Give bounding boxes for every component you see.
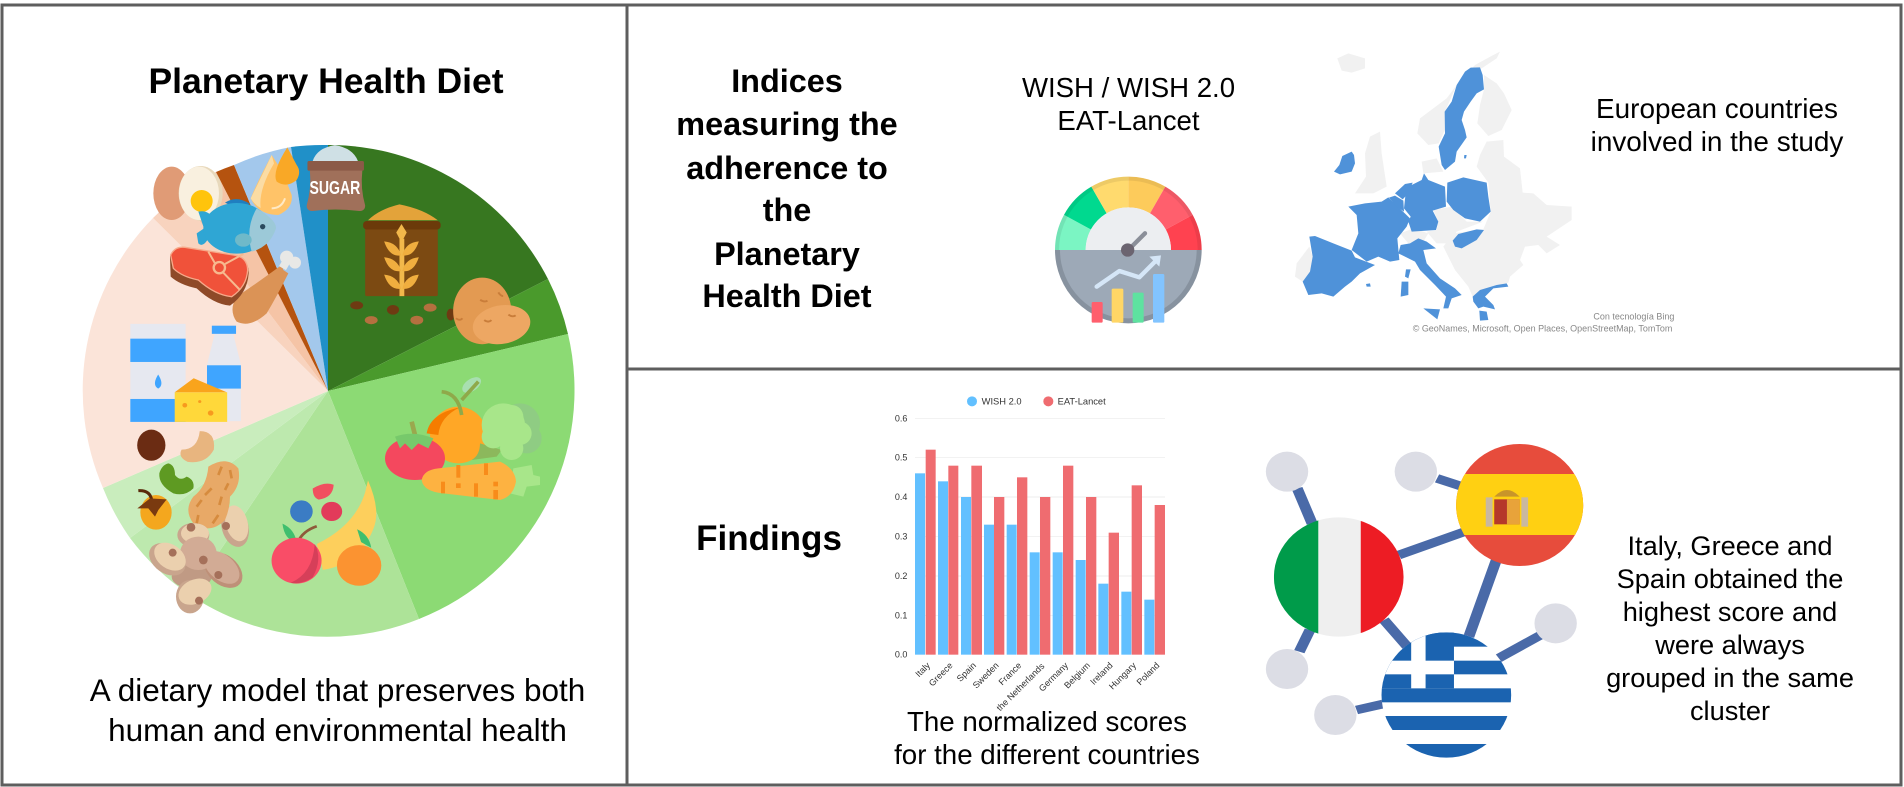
flag: Spain bbox=[1454, 443, 1585, 567]
heading: Indices measuring the adherence: measuring the bbox=[676, 106, 898, 142]
label: European countries involved bbox=[1591, 93, 1843, 157]
y axis labels: 0.4 bbox=[895, 492, 907, 502]
heading: Indices measuring the adherence: adherence to bbox=[686, 150, 888, 186]
network: country cluster bbox=[1266, 443, 1585, 758]
label: European countries involved: involved in the study bbox=[1591, 126, 1843, 157]
non-study countries bbox=[1295, 52, 1572, 297]
heading: Indices measuring the adherence bbox=[676, 63, 898, 314]
icon: sugar bag bbox=[307, 145, 365, 211]
y axis labels: 0.5 bbox=[895, 453, 907, 463]
icon: steak bbox=[170, 247, 249, 306]
food icons on the pie bbox=[130, 145, 542, 613]
icon: grain sack bbox=[350, 204, 455, 325]
x axis country labels: Italy bbox=[913, 660, 932, 679]
label: index names: WISH / WISH 2.0 bbox=[1022, 72, 1235, 103]
x axis country labels: Spain bbox=[955, 660, 978, 684]
icon group: remaining foods bbox=[130, 145, 534, 586]
caption: dietary model definition: human and environmental health bbox=[108, 712, 567, 748]
x axis country labels: Poland bbox=[1135, 660, 1161, 687]
icon: potatoes bbox=[453, 278, 534, 349]
x axis country labels: Greece bbox=[927, 660, 955, 688]
icon: cheese bbox=[175, 378, 227, 422]
y axis labels: 0.1 bbox=[895, 610, 907, 620]
x axis country labels: Ireland bbox=[1088, 660, 1115, 687]
icon: milk carton and bottle bbox=[130, 324, 241, 422]
icon: vegetables bbox=[385, 374, 542, 500]
heading: Indices measuring the adherence: Planetary bbox=[714, 236, 860, 272]
label: cluster finding: were always bbox=[1654, 629, 1805, 660]
bars: EAT-Lancet bbox=[926, 450, 1165, 655]
label: cluster finding: highest score and bbox=[1623, 596, 1837, 627]
icon: eggs bbox=[153, 166, 223, 221]
y axis labels: 0.3 bbox=[895, 532, 907, 542]
x axis country labels: Hungary bbox=[1107, 660, 1138, 691]
icon: legumes, peanut and cashews bbox=[137, 461, 253, 613]
label: European countries involved: European countries bbox=[1596, 93, 1838, 124]
heading: Indices measuring the adherence: the bbox=[763, 192, 811, 228]
icon: oil drops bbox=[251, 147, 299, 215]
y axis labels: 0.2 bbox=[895, 571, 907, 581]
map: Europe with study countries highlighted bbox=[1295, 52, 1674, 334]
icon: fish bbox=[197, 199, 276, 254]
x axis country labels: Sweden bbox=[971, 660, 1001, 690]
heading: Indices measuring the adherence: Health Diet bbox=[702, 278, 872, 314]
label: cluster finding: cluster bbox=[1690, 695, 1770, 726]
heading: Findings: Findings bbox=[696, 519, 842, 558]
x axis country labels: France bbox=[997, 660, 1023, 687]
x axis country labels: Belgium bbox=[1062, 660, 1092, 690]
bar chart: normalized scores by country bbox=[895, 396, 1165, 713]
label: index names: EAT-Lancet bbox=[1057, 105, 1200, 136]
panel: indices and European countries bbox=[627, 5, 1901, 369]
icon: sugar bag: SUGAR bbox=[309, 178, 360, 199]
flag: Greece bbox=[1380, 632, 1513, 758]
chart legend: WISH 2.0 bbox=[982, 396, 1022, 406]
heading: Indices measuring the adherence: Indices bbox=[731, 63, 843, 99]
study countries bbox=[1303, 67, 1508, 321]
panel: Planetary Health Diet bbox=[2, 5, 627, 785]
label: cluster finding bbox=[1606, 530, 1854, 726]
chart legend: EAT-Lancet bbox=[1058, 396, 1106, 406]
icon: almond and cashew bbox=[137, 430, 214, 462]
caption: dietary model definition: A dietary model that preserves both bbox=[90, 672, 585, 708]
map attribution: © GeoNames, Microsoft, Open Places, OpenStreetMap, TomTom bbox=[1413, 324, 1672, 334]
y axis labels: 0.0 bbox=[895, 650, 907, 660]
heading: Planetary Health Diet: Planetary Health Diet bbox=[148, 61, 504, 101]
x axis country labels: the Netherlands bbox=[994, 661, 1047, 713]
y axis labels bbox=[895, 413, 907, 660]
label: cluster finding: grouped in the same bbox=[1606, 662, 1854, 693]
icon: chicken leg bbox=[232, 251, 301, 324]
y axis labels: 0.6 bbox=[895, 413, 907, 423]
caption: dietary model definition bbox=[90, 672, 585, 748]
chart legend bbox=[967, 396, 1106, 406]
x axis country labels bbox=[913, 660, 1161, 713]
bars: WISH 2.0 bbox=[915, 473, 1154, 655]
map attribution: Con tecnología Bing bbox=[1593, 312, 1674, 322]
chart caption bbox=[894, 706, 1200, 770]
chart caption: for the different countries bbox=[894, 739, 1200, 770]
pie chart: diet composition bbox=[83, 145, 575, 637]
x axis country labels: Germany bbox=[1037, 660, 1070, 694]
map attribution bbox=[1413, 312, 1674, 334]
label: cluster finding: Spain obtained the bbox=[1617, 563, 1843, 594]
panel: findings bbox=[627, 369, 1901, 785]
chart caption: The normalized scores bbox=[907, 706, 1187, 737]
label: cluster finding: Italy, Greece and bbox=[1627, 530, 1833, 561]
icon: fruits bbox=[272, 480, 381, 586]
icon: gauge with bars bbox=[1055, 177, 1202, 323]
label: index names bbox=[1022, 72, 1235, 136]
flag: Italy bbox=[1274, 517, 1405, 637]
icons: protein group bbox=[153, 147, 301, 324]
